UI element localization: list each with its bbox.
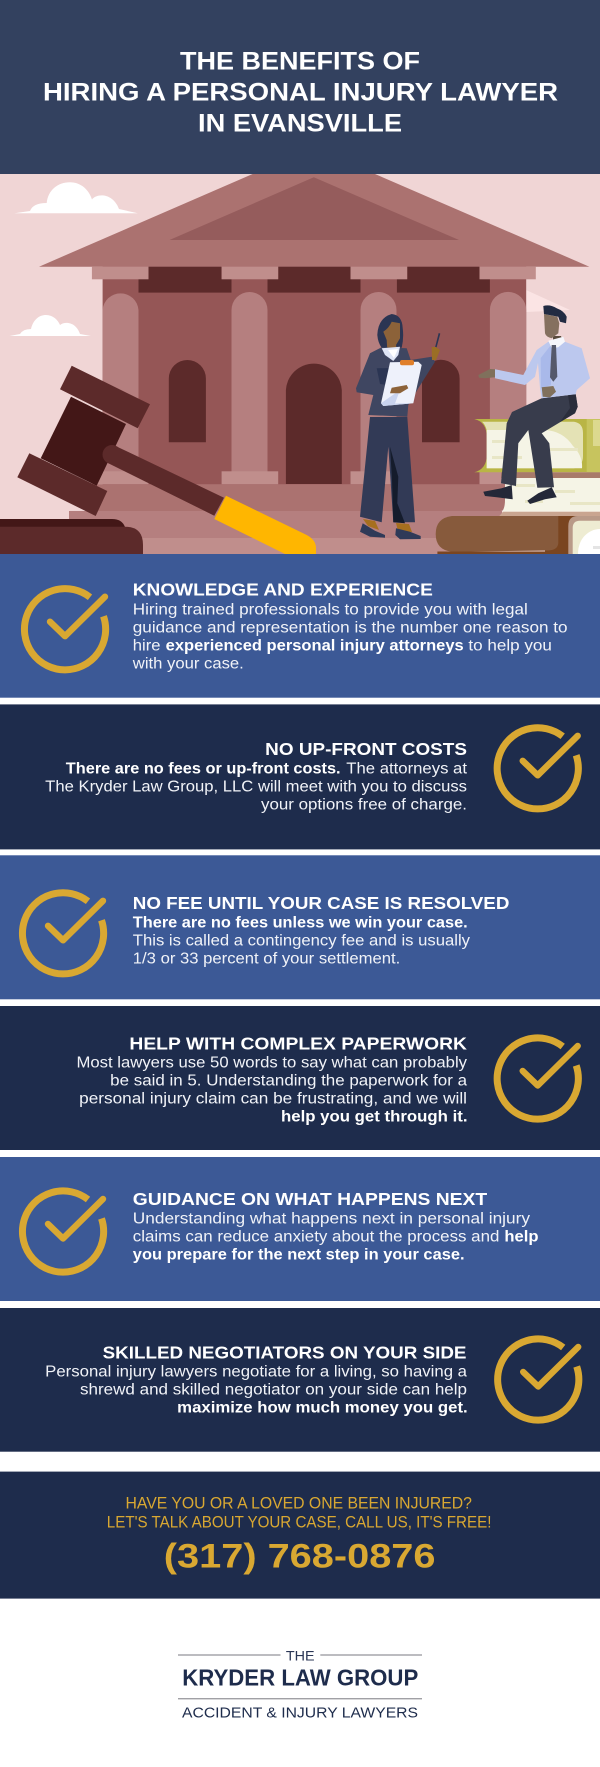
icon: gavel (0, 366, 316, 554)
body text: your options free of charge. (261, 796, 467, 813)
body text: There are no fees unless we win your case. (133, 914, 468, 931)
body text: The attorneys at (346, 760, 468, 777)
body text (133, 914, 470, 967)
panel: no up-front costs (0, 704, 600, 849)
body text: shrewd and skilled negotiator on your side can help (80, 1382, 467, 1399)
body text (45, 1364, 468, 1417)
body text: guidance and representation is the number one reason to (133, 619, 568, 636)
call to action text: HAVE YOU OR A LOVED ONE BEEN INJURED? (126, 1494, 472, 1513)
logo: The Kryder Law Group: THE (286, 1648, 315, 1664)
panel: no fee until your case is resolved (0, 855, 600, 999)
title: THE BENEFITS OF (180, 48, 420, 76)
body text: help you get through it. (281, 1108, 468, 1125)
panel: help with complex paperwork (0, 1006, 600, 1150)
body text: be said in 5. Understanding the paperwork for a (110, 1072, 468, 1089)
heading: HELP WITH COMPLEX PAPERWORK (129, 1033, 467, 1053)
body text: claims can reduce anxiety about the process and (133, 1228, 499, 1245)
phone number: (317) 768-0876 (164, 1538, 436, 1576)
body text: personal injury claim can be frustrating, and we will (79, 1090, 467, 1107)
body text: Hiring trained professionals to provide you with legal (133, 601, 528, 618)
panel: skilled negotiators on your side (0, 1308, 600, 1452)
title (43, 48, 558, 138)
panel: call to action (0, 1472, 600, 1599)
body text (133, 1210, 539, 1263)
icon: gold check circle (498, 1339, 579, 1420)
body text: maximize how much money you get. (177, 1400, 468, 1417)
body text (76, 1054, 468, 1125)
heading: NO FEE UNTIL YOUR CASE IS RESOLVED (133, 893, 509, 913)
panel: title header (0, 0, 600, 174)
panel: guidance on what happens next (0, 1157, 600, 1301)
call to action text (107, 1494, 491, 1532)
icon: cloud small (10, 315, 91, 336)
logo: The Kryder Law Group: ACCIDENT & INJURY LAWYERS (182, 1705, 418, 1721)
heading: NO UP-FRONT COSTS (265, 739, 467, 759)
body text: you prepare for the next step in your case. (133, 1246, 465, 1263)
body text: experienced personal injury attorneys (166, 637, 464, 654)
logo: The Kryder Law Group (178, 1648, 422, 1721)
body text (45, 760, 468, 813)
heading: SKILLED NEGOTIATORS ON YOUR SIDE (103, 1342, 467, 1362)
icon: gold check circle (22, 1191, 104, 1272)
body text: Understanding what happens next in personal injury (133, 1210, 530, 1227)
title: HIRING A PERSONAL INJURY LAWYER (43, 79, 558, 107)
heading: KNOWLEDGE AND EXPERIENCE (133, 580, 433, 600)
illustration: seated man in shirt and tie (478, 305, 590, 504)
body text: Most lawyers use 50 words to say what can probably (76, 1054, 467, 1071)
body text: with your case. (132, 655, 244, 672)
body text: 1/3 or 33 percent of your settlement. (133, 950, 400, 967)
courthouse building (39, 174, 589, 554)
logo: The Kryder Law Group: KRYDER LAW GROUP (182, 1665, 418, 1691)
title: IN EVANSVILLE (198, 110, 402, 138)
icon: cloud large (14, 182, 138, 213)
illustration: courthouse scene (0, 174, 600, 577)
body text: hire (133, 637, 160, 654)
body text: to help you (468, 637, 552, 654)
panel: knowledge and experience (0, 554, 600, 698)
heading: GUIDANCE ON WHAT HAPPENS NEXT (133, 1189, 488, 1209)
body text (132, 601, 568, 672)
icon: gold check circle (24, 589, 106, 670)
icon: gold check circle (497, 728, 578, 809)
body text: help (504, 1228, 538, 1245)
illustration: woman lawyer with clipboard (356, 314, 440, 539)
body text: Personal injury lawyers negotiate for a living, so having a (45, 1364, 468, 1381)
icon: gold check circle (22, 893, 104, 974)
body text: This is called a contingency fee and is usually (133, 932, 470, 949)
body text: The Kryder Law Group, LLC will meet with you to discuss (45, 778, 467, 795)
illustration: stack of law books (436, 419, 600, 577)
icon: gold check circle (497, 1038, 578, 1119)
call to action text: LET'S TALK ABOUT YOUR CASE, CALL US, IT'S FREE! (107, 1513, 491, 1532)
body text: There are no fees or up-front costs. (66, 760, 341, 777)
